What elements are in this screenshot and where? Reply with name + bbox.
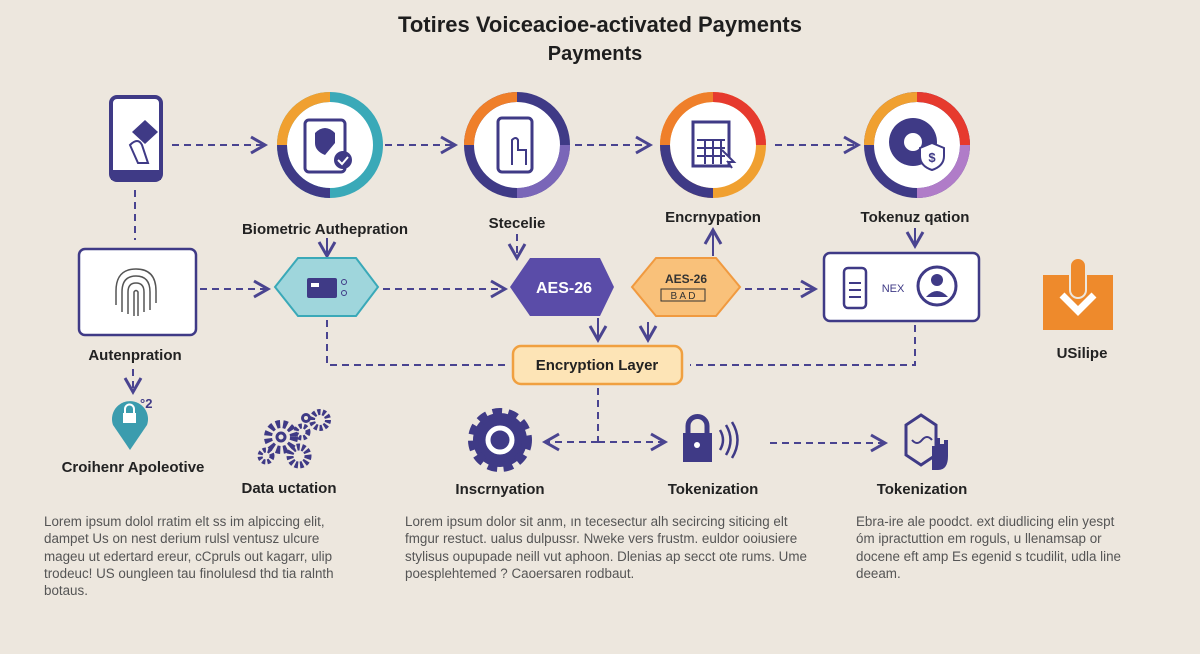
paragraph right: deeam.	[856, 566, 901, 581]
paragraph middle: stylisus oupupade neill vut aphoon. Dlenias ap secct ote rums. Ume	[405, 549, 807, 564]
hexagon orange AES: B A D	[670, 291, 696, 302]
label tokenization 2: Tokenization	[877, 481, 967, 498]
icon: lock waves	[683, 416, 738, 462]
hexagon teal	[275, 258, 378, 316]
labels row 1: Tokenuz qation	[861, 209, 969, 226]
paragraph left: mageu ut edertard ereur, cCpruls out kagarr, ulip	[44, 549, 332, 564]
title: Totires Voiceacioe-activated Payments	[398, 12, 802, 37]
paragraph left: Lorem ipsum dolol rratim elt ss im alpiccing elit,	[44, 514, 325, 529]
arrows top row	[135, 145, 858, 240]
paragraph middle	[405, 514, 807, 581]
paragraph right: docene eft amp Es egenid s tcudilit, udla line	[856, 549, 1121, 564]
icon: phone	[111, 97, 161, 180]
ring: encryption	[665, 97, 761, 193]
label data uctation: Data uctation	[241, 480, 337, 497]
icon: hex hand	[906, 415, 948, 470]
labels row 1	[242, 209, 969, 238]
labels row 1: Stecelie	[489, 215, 545, 232]
paragraph middle: fmgur restuct. ualus dulpussr. Nweke vers frustm. euldor ooiusiere	[405, 531, 797, 546]
icon: gears	[260, 412, 328, 465]
hexagon purple AES	[510, 258, 614, 316]
paragraph right	[856, 514, 1121, 581]
ring: tokenization	[869, 97, 965, 193]
title: Payments	[548, 43, 642, 65]
encryption layer box: Encryption Layer	[536, 357, 658, 374]
icon: pin lock: °2	[140, 396, 152, 411]
label USilipe: USilipe	[1057, 345, 1107, 362]
paragraph left	[44, 514, 334, 598]
ring: biometric	[282, 97, 378, 193]
NEX box: NEX	[882, 283, 905, 295]
fingerprint box	[79, 249, 196, 335]
encryption layer box	[513, 346, 682, 384]
labels row 1: Encrnypation	[665, 209, 761, 226]
title	[398, 12, 802, 65]
arrows row 2	[200, 289, 915, 365]
labels row 1: Biometric Authepration	[242, 221, 408, 238]
NEX box	[824, 253, 979, 321]
icon: pin lock	[112, 396, 152, 450]
paragraph left: botaus.	[44, 583, 88, 598]
ring: stecelie	[469, 97, 565, 193]
hexagon orange AES: AES-26	[665, 272, 707, 286]
icon: big gear	[473, 413, 527, 467]
paragraph right: óm ipractuttion em roguls, u llenamsap or	[856, 531, 1102, 546]
arrows lower	[133, 369, 885, 443]
paragraph middle: poesplehtemed ? Caoersaren rodbaut.	[405, 566, 634, 581]
paragraph right: Ebra-ire ale poodct. ext diudlicing elin yespt	[856, 514, 1115, 529]
label tokenization 1: Tokenization	[668, 481, 758, 498]
paragraph left: dampet Us on nest derium rulsl ventusz ulcure	[44, 531, 319, 546]
icon: orange shield	[1043, 258, 1113, 330]
paragraph middle: Lorem ipsum dolor sit anm, ın tecesectur alh secircing siticing elt	[405, 514, 788, 529]
paragraph left: trodeuc! US oungleen tau finolulesd thd tia ralnth	[44, 566, 334, 581]
label inscrnyation: Inscrnyation	[455, 481, 545, 498]
hexagon purple AES: AES-26	[536, 280, 592, 297]
hexagon orange AES	[632, 258, 740, 316]
ring: tokenization: $	[928, 150, 936, 165]
label autenpration: Autenpration	[88, 347, 182, 364]
label crolhenr: Croihenr Apoleotive	[62, 459, 204, 476]
arrows vertical	[327, 228, 915, 258]
